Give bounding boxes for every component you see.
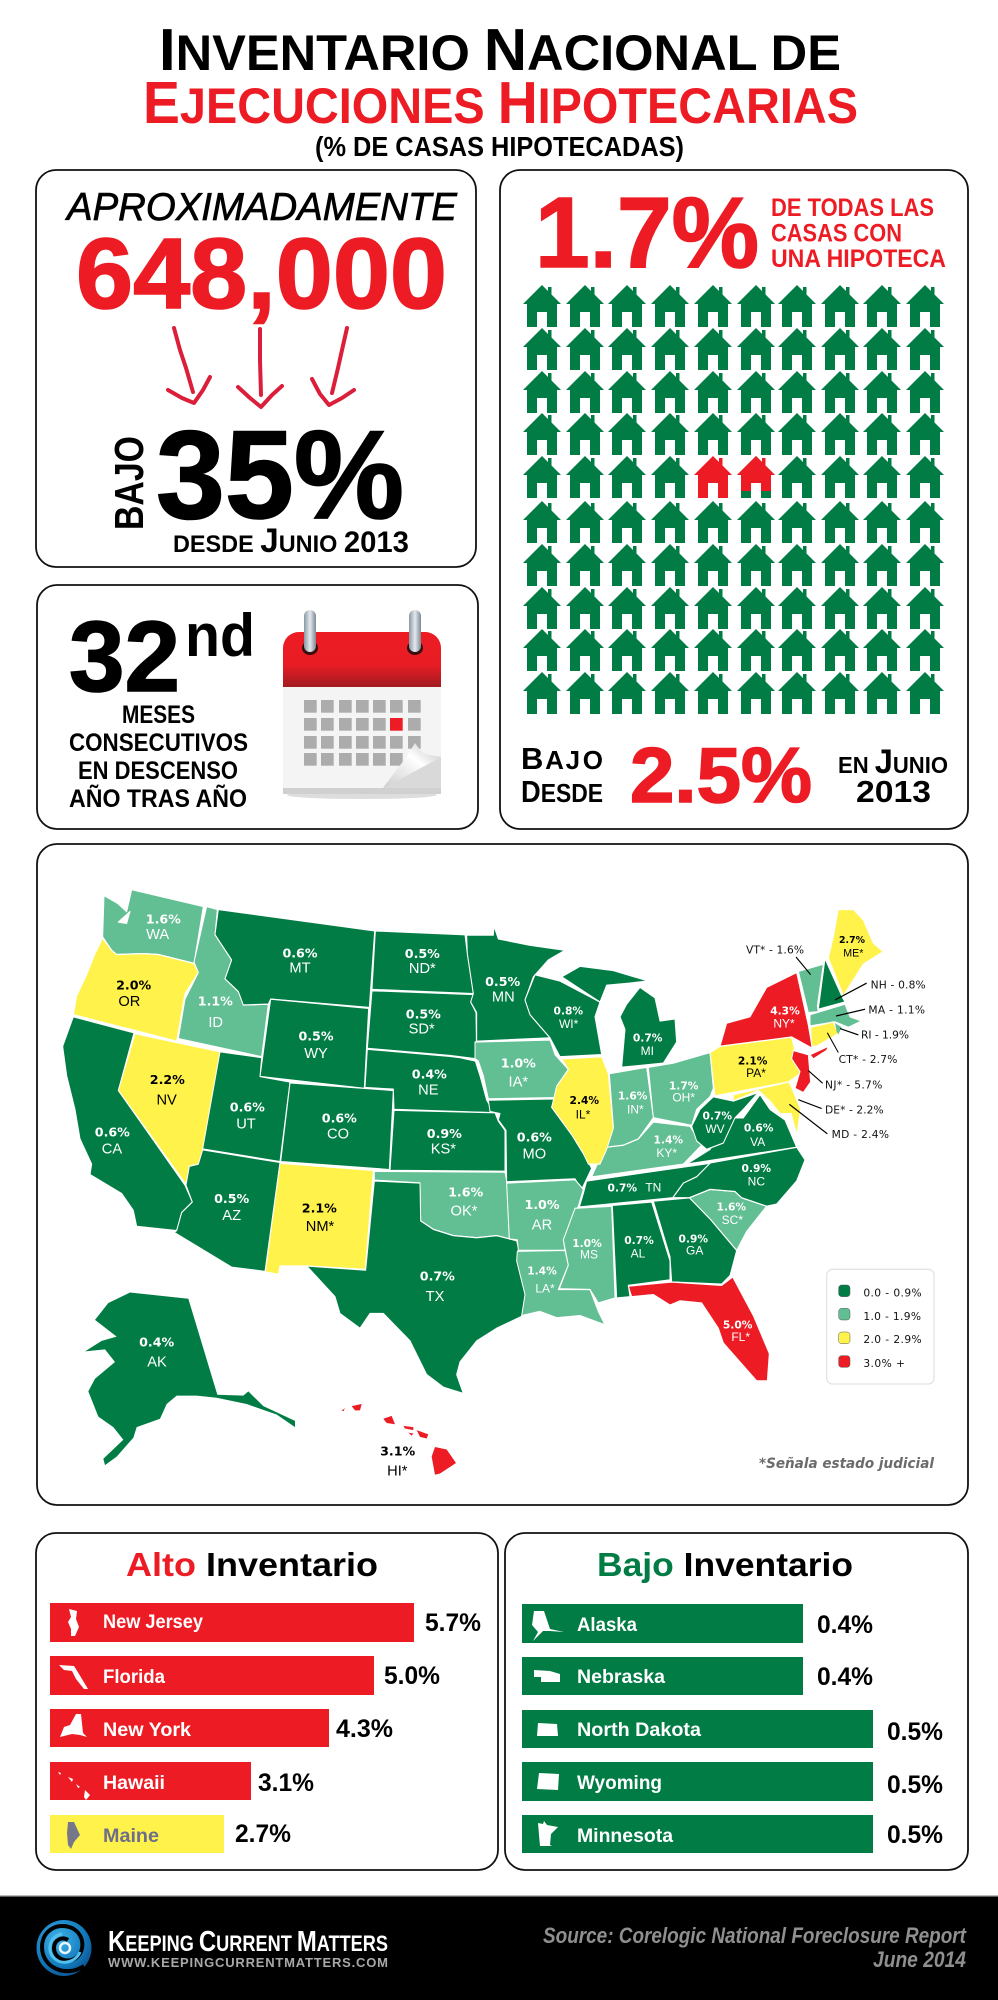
map labels: west and central: 2.1% [302,1201,337,1216]
title: (% DE CASAS HIPOTECADAS) [315,131,684,162]
callouts: northeast states: NH - 0.8% [871,979,926,992]
map labels: east: NC [748,1175,765,1189]
map labels: east: SC* [722,1213,743,1227]
heading: aproximadamente: APROXIMADAMENTE [65,186,458,229]
bar: new jersey: New Jersey [103,1612,203,1633]
panel: bajo inventario [505,1533,968,1870]
text: en junio 2013: 2013 [856,774,931,809]
bar: minnesota: Minnesota [577,1826,673,1847]
text: meses consecutivos: CONSECUTIVOS [69,729,248,757]
map labels: west and central: 0.4% [139,1335,175,1350]
bar: minnesota [522,1815,943,1853]
title: EJECUCIONES HIPOTECARIAS [143,70,858,136]
map labels: east: PA* [746,1066,766,1080]
map labels: east: 0.7% [633,1031,663,1044]
map labels: east: 0.8% [554,1004,583,1017]
map labels: west and central: UT [236,1117,256,1133]
bar: nebraska: Nebraska [577,1667,665,1688]
text: bajo desde: B A J O [521,741,603,776]
map labels: west and central: NM* [306,1219,335,1235]
map labels: west and central: ID [208,1015,223,1031]
map labels: west and central: 0.6% [322,1110,357,1125]
map labels: east: 0.6% [517,1130,552,1145]
map labels: east: VA [750,1135,765,1149]
bar: maine: 2.7% [235,1820,291,1848]
map labels: east: 2.4% [570,1094,599,1107]
map labels: west and central: OK* [451,1203,478,1219]
heading: bajo inventario: Bajo Inventario [597,1546,853,1583]
number: 32nd: nd [185,602,255,669]
map labels: east: AR [532,1218,552,1234]
map labels: east: IA* [509,1074,528,1090]
map labels: west and central: WY [304,1046,328,1062]
footnote: judicial state: *Señala estado judicial [759,1456,934,1472]
map labels: west and central: NE [418,1083,439,1099]
callouts: northeast states: VT* - 1.6% [746,944,804,957]
callouts: northeast states: NJ* - 5.7% [825,1078,882,1091]
bar: nebraska: 0.4% [817,1663,873,1691]
text: de todas las casas: DE TODAS LAS [771,194,934,222]
number: 648,000: 648,000 [76,218,447,330]
map labels: east: 1.4% [654,1133,683,1146]
bar: north dakota: North Dakota [577,1720,701,1741]
map labels: west and central [95,911,484,1480]
map labels: east: 0.7% [703,1110,732,1123]
legend: 2.0 - 2.9% [863,1333,922,1346]
map labels: west and central: OR [118,994,140,1010]
map labels: east: AL [631,1247,646,1261]
bar: new york: 4.3% [336,1715,393,1743]
number: 32nd: 32 [69,601,180,713]
heading: alto inventario: Alto Inventario [126,1546,378,1583]
map labels: west and central: SD* [409,1022,435,1038]
callouts: northeast states: DE* - 2.2% [825,1104,884,1117]
map labels: east: WI* [559,1017,579,1031]
map labels: east: 0.5% [485,974,521,989]
number: 2.5%: 2.5% [630,731,812,819]
bar: minnesota: 0.5% [887,1821,943,1849]
map labels: east: 0.7% [624,1234,654,1247]
map labels: west and central: CO [327,1126,349,1142]
text: bajo rotated: BAJO [106,436,152,530]
number: 1.7%: 1.7% [535,177,759,289]
legend: 3.0% + [863,1357,905,1370]
map labels: east: 0.7% [608,1181,637,1194]
bar: new york: New York [103,1720,191,1741]
map labels: east: 2.7% [839,935,866,946]
map labels: east: KY* [656,1146,677,1160]
map labels: east: IL* [576,1107,591,1121]
map labels: west and central: WA [146,927,169,943]
legend [827,1269,934,1384]
bar: alaska [522,1604,873,1643]
bar: maine [50,1815,291,1853]
bar: florida: Florida [103,1667,165,1688]
map labels: east: MO [523,1146,546,1162]
map labels: west and central: TX [426,1289,445,1305]
panel: 1.7% houses [500,170,968,829]
bar: north dakota [522,1710,943,1748]
text: en junio 2013: EN JUNIO [838,743,948,781]
text: bajo desde: DESDE [521,774,603,809]
bar: alaska: Alaska [577,1615,637,1636]
text: de todas las casas: CASAS CON [771,220,902,248]
map labels: east: 5.0% [723,1319,753,1332]
brand name: WWW.KEEPINGCURRENTMATTERS.COM [108,1955,388,1970]
text: bajo desde [521,741,603,809]
text: meses consecutivos [69,701,248,813]
bar: new jersey [50,1603,481,1642]
map labels: east: 0.9% [742,1162,771,1175]
bar: maine: Maine [103,1826,159,1847]
map labels: east: MS [580,1248,598,1262]
map labels: east: WV [705,1122,725,1136]
bar: nebraska [522,1657,873,1695]
bar: north dakota: 0.5% [887,1718,943,1746]
map labels: east: IN* [627,1103,644,1117]
bar: new jersey: 5.7% [425,1609,481,1637]
bar: hawaii: 3.1% [258,1769,314,1797]
map labels: west and central: CA [102,1141,122,1157]
map labels: east: 1.4% [527,1265,557,1278]
map labels: west and central: 0.5% [298,1029,334,1044]
number: 35%: 35% [156,406,404,545]
map labels: west and central: MT [289,961,311,977]
map labels: west and central: 0.7% [420,1268,455,1283]
map labels: east: LA* [535,1281,555,1295]
map labels: west and central: 0.6% [230,1100,265,1115]
map labels: west and central: 0.5% [405,946,440,961]
map labels: west and central: 2.0% [116,977,152,992]
map labels: east: 0.6% [744,1122,774,1135]
callouts: northeast states: MA - 1.1% [868,1003,925,1016]
map labels: west and central: NV [156,1093,177,1109]
callouts: northeast states: MD - 2.4% [832,1128,889,1141]
map labels: west and central: 0.6% [95,1125,130,1140]
source [543,1923,967,1972]
map labels: east: 1.0% [572,1237,602,1250]
map labels: west and central: 0.6% [282,945,318,960]
map labels: east: FL* [731,1330,750,1344]
source: June 2014 [873,1947,966,1972]
map labels: west and central: 0.5% [214,1191,250,1206]
map labels: west and central: 1.6% [146,911,181,926]
map labels: west and central: ND* [409,961,436,977]
icon: calendar [283,610,441,799]
map labels: west and central: 2.2% [150,1072,185,1087]
panel: us map [37,844,968,1505]
panel: alto inventario [36,1533,498,1870]
brand name [108,1926,388,1970]
map labels: east: 1.0% [524,1197,560,1212]
title [143,17,858,162]
footer [0,1895,998,2000]
map labels: west and central: 0.4% [412,1066,447,1081]
bar: florida: 5.0% [384,1662,440,1690]
map labels: west and central: AZ [222,1208,241,1224]
logo: blue swirl [36,1920,92,1976]
icon: three hand drawn arrows [168,328,354,407]
brand name: KEEPING CURRENT MATTERS [108,1926,388,1958]
callouts: northeast states: CT* - 2.7% [839,1053,897,1066]
callouts: northeast states [746,944,926,1141]
title: INVENTARIO NACIONAL DE [159,17,841,83]
map: western and central states [63,890,527,1475]
text: en junio 2013 [838,743,948,809]
map labels: east: TN [645,1180,661,1194]
map labels: east [485,935,866,1344]
bar: wyoming: 0.5% [887,1771,943,1799]
map labels: east: 4.3% [770,1004,800,1017]
map labels: east: 1.6% [618,1090,648,1103]
map labels: east: NY* [773,1017,795,1031]
map labels: east: 1.7% [669,1079,699,1092]
text: desde junio 2013: DESDE JUNIO 2013 [173,522,409,560]
bar: hawaii [50,1762,314,1800]
map labels: east: GA [686,1244,703,1258]
map labels: east: 2.1% [738,1055,768,1068]
text: meses consecutivos: EN DESCENSO [78,757,238,785]
bar: wyoming: Wyoming [577,1773,662,1794]
map labels: west and central: AK [147,1355,167,1371]
map labels: west and central: 0.9% [427,1126,462,1141]
bar: florida [50,1656,440,1695]
map labels: west and central: 3.1% [380,1443,416,1458]
map labels: west and central: HI* [387,1464,408,1480]
pictogram: one hundred houses [523,285,944,714]
map labels: east: 1.0% [501,1056,536,1071]
map labels: west and central: KS* [431,1141,456,1157]
map labels: east: 0.9% [679,1232,708,1245]
legend: 1.0 - 1.9% [863,1310,921,1323]
bar: hawaii: Hawaii [103,1773,165,1794]
text: de todas las casas [771,194,946,273]
text: de todas las casas: UNA HIPOTECA [771,245,946,273]
bar: alaska: 0.4% [817,1611,873,1639]
map labels: east: ME* [843,947,863,959]
text: meses consecutivos: AÑO TRAS AÑO [69,783,247,813]
map labels: west and central: 1.1% [198,993,233,1008]
text: meses consecutivos: MESES [122,701,195,729]
map labels: west and central: 1.6% [448,1185,484,1200]
bar: new york [50,1709,393,1747]
map labels: east: MI [641,1044,654,1058]
number: 32nd [69,601,255,713]
map labels: east: 1.6% [717,1200,746,1213]
panel: 648,000 down 35% [36,170,476,567]
map labels: east: OH* [672,1090,695,1104]
panel: 32nd consecutive months [37,585,478,829]
map labels: east: MN [492,989,515,1005]
map labels: west and central: 0.5% [406,1006,441,1021]
bar: wyoming [522,1762,943,1801]
map: eastern states [467,909,883,1381]
callouts: northeast states: RI - 1.9% [861,1029,909,1042]
legend: 0.0 - 0.9% [863,1287,922,1300]
